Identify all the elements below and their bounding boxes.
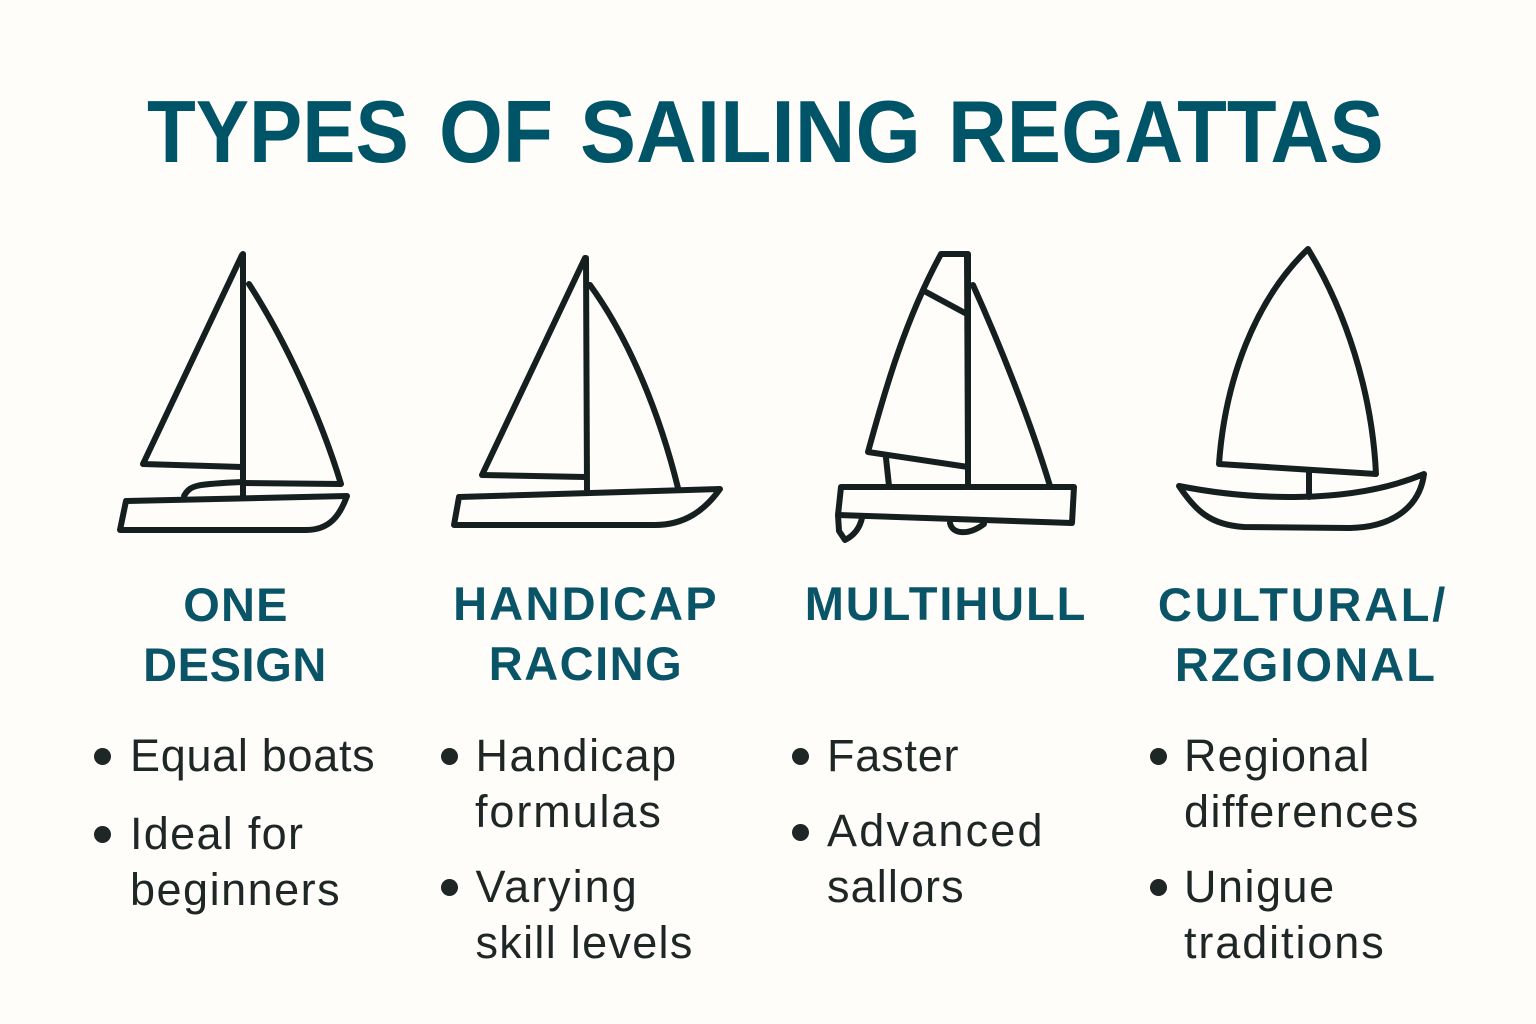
list: one design: beginners xyxy=(130,864,341,915)
icon: handicap racing boat xyxy=(454,258,720,525)
heading: handicap racing: HANDICAP xyxy=(453,577,719,630)
list: handicap racing: Varying xyxy=(476,861,639,912)
list: cultural regional: differences xyxy=(1184,786,1420,837)
list: one design xyxy=(94,730,375,915)
heading: one design: ONE xyxy=(183,578,289,631)
list: multihull: Faster xyxy=(827,730,959,781)
list: multihull: sallors xyxy=(827,861,965,912)
list: handicap racing: skill levels xyxy=(476,917,694,968)
list: cultural regional: Unigue xyxy=(1184,861,1336,912)
title: TYPES xyxy=(147,82,409,181)
heading: cultural regional: RZGIONAL xyxy=(1175,638,1437,691)
title: REGATTAS xyxy=(948,82,1384,181)
icon: multihull boat xyxy=(838,254,1074,540)
heading: handicap racing xyxy=(453,577,719,690)
heading: cultural regional xyxy=(1158,578,1448,691)
heading: one design xyxy=(143,578,327,691)
list: cultural regional xyxy=(1150,730,1420,968)
list: cultural regional: Regional xyxy=(1184,730,1370,781)
title: OF xyxy=(439,82,553,181)
list: one design: Ideal for xyxy=(130,808,304,859)
list: handicap racing: Handicap xyxy=(476,730,678,781)
heading: cultural regional: CULTURAL/ xyxy=(1158,578,1448,631)
list: one design: Equal boats xyxy=(130,730,375,781)
heading: one design: DESIGN xyxy=(143,638,327,691)
list: handicap racing xyxy=(441,730,694,968)
list: multihull: Advanced xyxy=(827,805,1045,856)
icon: cultural regional boat xyxy=(1179,249,1424,528)
icon: one design boat xyxy=(120,254,347,530)
list: cultural regional: traditions xyxy=(1184,917,1386,968)
list: multihull xyxy=(792,730,1045,912)
heading: handicap racing: RACING xyxy=(489,637,683,690)
list: handicap racing: formulas xyxy=(475,786,663,837)
title: SAILING xyxy=(580,82,921,181)
title xyxy=(147,82,1384,181)
heading: multihull: MULTIHULL xyxy=(805,577,1087,630)
